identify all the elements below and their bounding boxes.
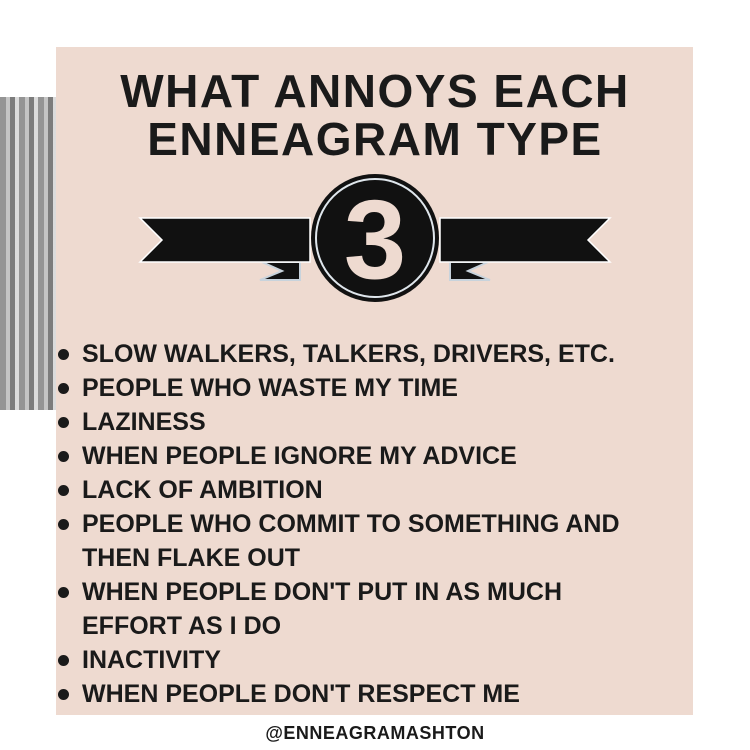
title (120, 65, 630, 165)
list: annoyances: WHEN PEOPLE IGNORE MY ADVICE (82, 442, 517, 470)
emblem: type 3 badge: 3 (344, 177, 406, 302)
list: annoyances: WHEN PEOPLE DON'T RESPECT ME (82, 680, 520, 708)
texture: left (0, 97, 56, 410)
list: annoyances: EFFORT AS I DO (82, 612, 281, 640)
list: annoyances: LACK OF AMBITION (82, 476, 323, 504)
list: annoyances: THEN FLAKE OUT (82, 544, 300, 572)
footer handle: @ENNEAGRAMASHTON (265, 723, 485, 743)
emblem: type 3 badge (138, 174, 612, 302)
list: annoyances: SLOW WALKERS, TALKERS, DRIVERS, ETC. (82, 340, 615, 368)
panel: background card (56, 47, 693, 715)
list: annoyances: LAZINESS (82, 408, 206, 436)
list: annoyances: WHEN PEOPLE DON'T PUT IN AS MUCH (82, 578, 562, 606)
list: annoyances (58, 340, 620, 708)
list: annoyances: PEOPLE WHO COMMIT TO SOMETHING AND (82, 510, 620, 538)
list: annoyances: PEOPLE WHO WASTE MY TIME (82, 374, 458, 402)
title: WHAT ANNOYS EACH (120, 65, 630, 117)
list: annoyances: INACTIVITY (82, 646, 221, 674)
title: ENNEAGRAM TYPE (147, 113, 603, 165)
